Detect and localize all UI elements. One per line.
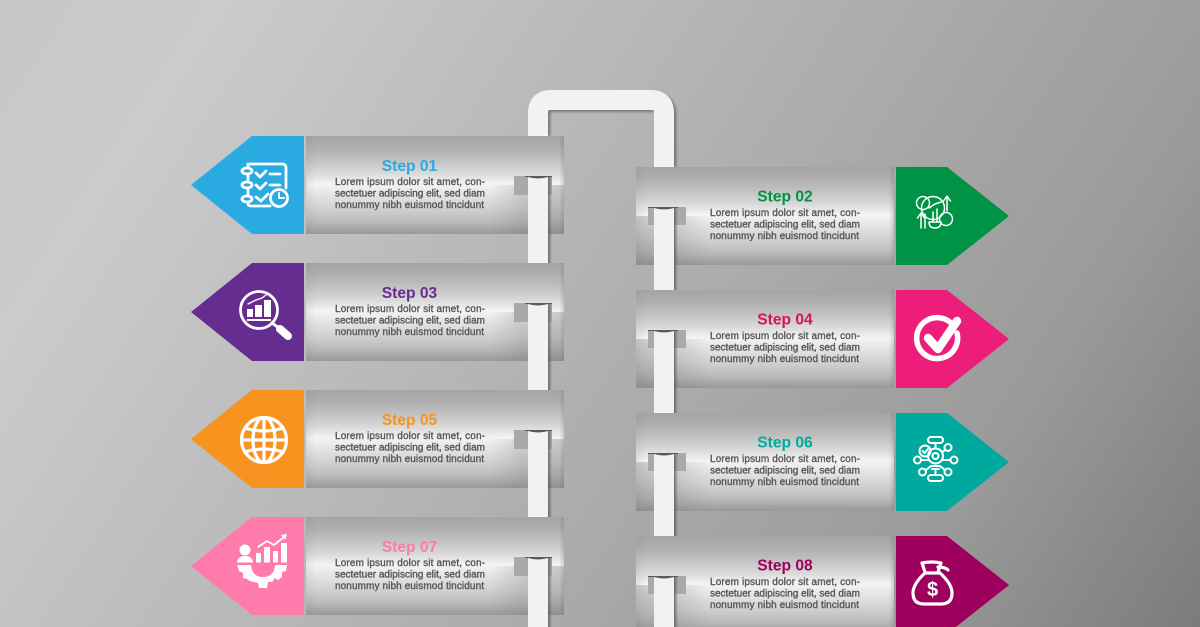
step 03 connector slot xyxy=(514,303,552,390)
icon: idea bulb network xyxy=(914,437,958,481)
step 02 text: nonummy nibh euismod tincidunt xyxy=(710,231,859,242)
step 07 text: sectetuer adipiscing elit, sed diam xyxy=(335,570,485,581)
step 03 bar xyxy=(306,263,564,361)
icon: check mark in circle xyxy=(917,318,958,359)
step 05 heading: Step 05 xyxy=(382,412,438,429)
step 05 connector slot xyxy=(514,430,552,517)
step 05 panel xyxy=(191,390,564,517)
step 04 panel xyxy=(636,290,1009,413)
step 01 panel xyxy=(191,136,564,263)
step 07 heading: Step 07 xyxy=(382,539,437,556)
step 06 connector slot xyxy=(648,453,686,536)
step 04 arrow xyxy=(896,290,1009,388)
step 08 bar xyxy=(636,536,894,627)
icon: gears, plant and arrows xyxy=(916,196,952,228)
step 06 panel xyxy=(636,413,1009,536)
step 04 text xyxy=(710,331,860,365)
step 03 heading: Step 03 xyxy=(382,285,438,302)
step 04 bar xyxy=(636,290,894,388)
icon: person, chart and gear xyxy=(237,534,287,588)
step 08 panel xyxy=(636,536,1009,627)
step 08 heading: Step 08 xyxy=(757,558,813,574)
step 06 bar xyxy=(636,413,894,511)
step 02 text: Lorem ipsum dolor sit amet, con- xyxy=(710,208,860,219)
icon: globe xyxy=(242,418,286,462)
step 01 arrow xyxy=(191,136,304,234)
step 04 text: sectetuer adipiscing elit, sed diam xyxy=(710,343,860,354)
icon: checklist xyxy=(242,164,288,206)
connector pipe xyxy=(538,100,666,170)
icon: magnifier with chart xyxy=(240,292,288,336)
icon: money bag: $ xyxy=(927,579,938,601)
step 05 arrow xyxy=(191,390,304,488)
step 07 text xyxy=(335,558,485,592)
step 03 arrow xyxy=(191,263,304,361)
step 01 text: nonummy nibh euismod tincidunt xyxy=(335,200,484,211)
step 04 heading: Step 04 xyxy=(757,312,813,328)
step 06 arrow xyxy=(896,413,1009,511)
step 08 text: sectetuer adipiscing elit, sed diam xyxy=(710,589,860,600)
step 06 heading: Step 06 xyxy=(757,434,813,452)
step 03 text: Lorem ipsum dolor sit amet, con- xyxy=(335,304,485,315)
icon: money bag xyxy=(913,562,952,604)
step 02 arrow xyxy=(896,167,1009,265)
step 07 bar xyxy=(306,517,564,615)
step 06 text xyxy=(710,454,860,488)
step 04 connector slot xyxy=(648,330,686,413)
step 05 text: Lorem ipsum dolor sit amet, con- xyxy=(335,431,485,442)
step 07 panel xyxy=(191,517,564,627)
step 02 panel xyxy=(636,167,1009,290)
step 01 text: sectetuer adipiscing elit, sed diam xyxy=(335,189,485,200)
step 05 text: sectetuer adipiscing elit, sed diam xyxy=(335,443,485,454)
step 05 text xyxy=(335,431,485,465)
step 08 text xyxy=(710,577,860,611)
step 03 text: nonummy nibh euismod tincidunt xyxy=(335,327,484,338)
step 08 text: nonummy nibh euismod tincidunt xyxy=(710,600,859,611)
step 03 text xyxy=(335,304,485,338)
step 05 bar xyxy=(306,390,564,488)
step 07 arrow xyxy=(191,517,304,615)
step 08 arrow xyxy=(896,536,1009,627)
step 02 text xyxy=(710,208,860,242)
step 01 text: Lorem ipsum dolor sit amet, con- xyxy=(335,177,485,188)
step 08 connector slot xyxy=(648,576,686,627)
step 01 connector slot xyxy=(514,176,552,263)
step 02 text: sectetuer adipiscing elit, sed diam xyxy=(710,220,860,231)
step 03 panel xyxy=(191,263,564,390)
step 02 heading: Step 02 xyxy=(757,188,813,206)
step 03 text: sectetuer adipiscing elit, sed diam xyxy=(335,316,485,327)
step 01 heading: Step 01 xyxy=(382,158,438,175)
step 06 text: sectetuer adipiscing elit, sed diam xyxy=(710,466,860,477)
step 07 connector slot xyxy=(514,557,552,627)
step 02 bar xyxy=(636,167,894,265)
step 06 text: Lorem ipsum dolor sit amet, con- xyxy=(710,454,860,465)
step 06 text: nonummy nibh euismod tincidunt xyxy=(710,477,859,488)
step 08 text: Lorem ipsum dolor sit amet, con- xyxy=(710,577,860,588)
step 02 connector slot xyxy=(648,207,686,290)
step 04 text: Lorem ipsum dolor sit amet, con- xyxy=(710,331,860,342)
step 05 text: nonummy nibh euismod tincidunt xyxy=(335,454,484,465)
step 07 text: Lorem ipsum dolor sit amet, con- xyxy=(335,558,485,569)
step 01 text xyxy=(335,177,485,211)
step 01 bar xyxy=(306,136,564,234)
step 04 text: nonummy nibh euismod tincidunt xyxy=(710,354,859,365)
step 07 text: nonummy nibh euismod tincidunt xyxy=(335,581,484,592)
